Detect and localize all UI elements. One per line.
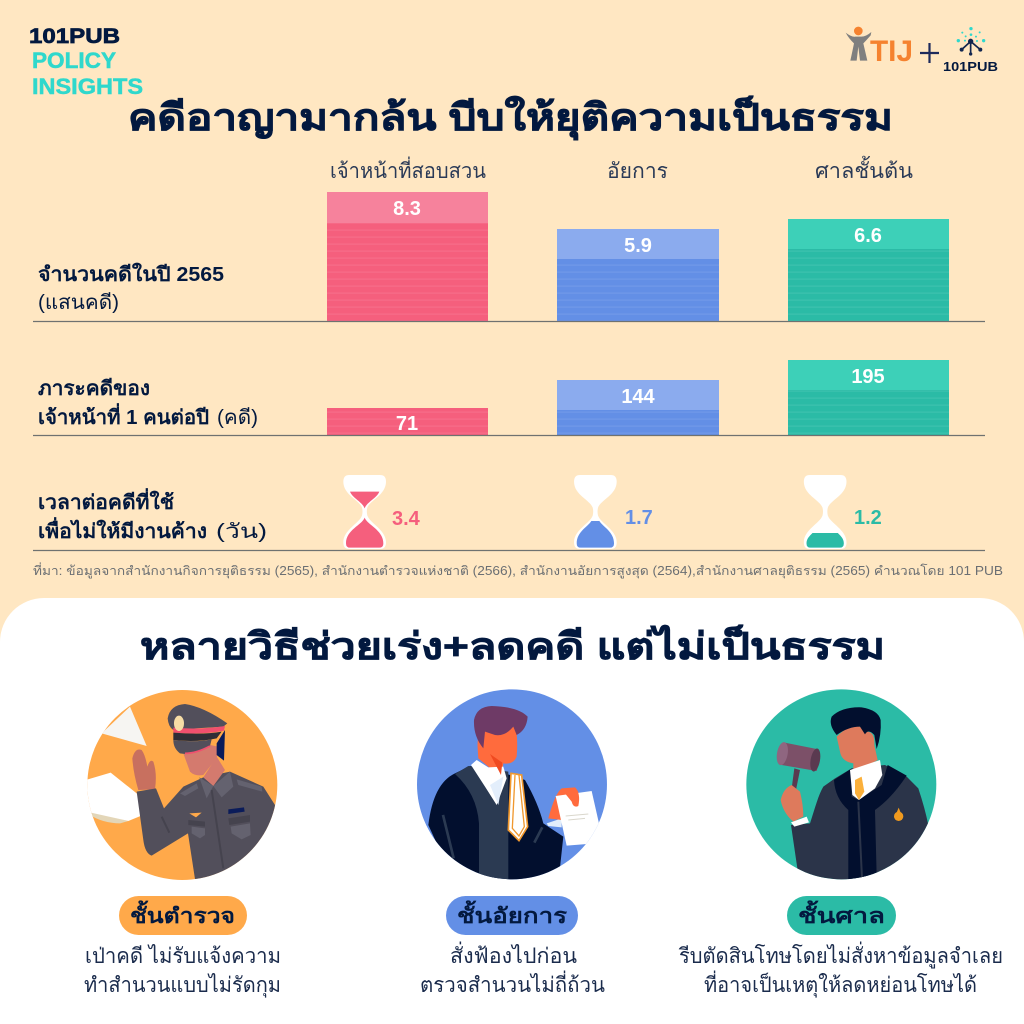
description: court: ที่อาจเป็นเหตุให้ลดหย่อนโทษได้ [704,970,977,998]
bar: investigators 8.3: 8.3 [393,198,421,220]
illustration: prosecutor [417,689,607,883]
row label: time per case: เพื่อไม่ให้มีงานค้าง [38,516,207,543]
row label: time per case: (วัน) [216,521,267,543]
description: police [84,944,281,998]
bar: investigators 8.3 [327,192,488,321]
hourglass: prosecutors 1.7 days [574,475,653,549]
bar: prosecutors 144 [557,380,719,435]
pill: police: ชั้นตำรวจ [130,900,235,928]
hourglass: courts 1.2 days [804,475,882,549]
plus sign [920,43,939,63]
column headings [330,156,913,183]
logos: TIJ + 101PUB [846,27,998,74]
bar: courts 6.6 [788,219,949,321]
row label: cases in 2565: จำนวนคดีในปี 2565 [38,262,224,286]
description: prosecutor [420,941,605,997]
logo: 101PUB Policy Insights: 101PUB [29,25,120,48]
illustration: police officer [83,690,277,890]
hourglass: investigators 3.4 days: 3.4 [392,508,421,530]
column: court level [678,896,1003,998]
column headings: ศาลชั้นต้น [815,156,913,183]
panel: methods that speed up cases [0,598,1024,1024]
description: prosecutor: สั่งฟ้องไปก่อน [450,941,577,968]
pill: prosecutor [446,896,578,935]
column headings: เจ้าหน้าที่สอบสวน [330,156,486,183]
logo: 101PUB Policy Insights: INSIGHTS [32,74,143,99]
column: prosecutor level [420,896,605,997]
row label: caseload per officer [38,377,258,429]
logo: 101PUB Policy Insights [29,25,143,99]
row label: caseload per officer: ภาระคดีของ [38,377,150,400]
row label: caseload per officer: เจ้าหน้าที่ 1 คนต่อปี [38,402,209,429]
hourglass: prosecutors 1.7 days: 1.7 [625,507,653,529]
row label: caseload per officer: (คดี) [217,407,258,429]
logo: 101PUB Policy Insights: POLICY [32,48,116,73]
bar: prosecutors 5.9 [557,229,719,321]
panel heading: หลายวิธีช่วยเร่ง+ลดคดี แต่ไม่เป็นธรรม [140,623,885,667]
hourglass: courts 1.2 days: 1.2 [854,507,882,529]
logos: TIJ + 101PUB: 101PUB [943,59,998,74]
icon: TIJ figure [846,27,871,61]
pill: court: ชั้นศาล [798,900,885,928]
column headings: อัยการ [607,160,668,183]
row label: cases in 2565: (แสนคดี) [38,292,119,314]
description: court [678,941,1003,998]
bar: prosecutors 5.9: 5.9 [624,235,652,257]
bar: courts 6.6: 6.6 [854,225,882,247]
bar: prosecutors 144: 144 [621,386,656,408]
row label: time per case: เวลาต่อคดีที่ใช้ [38,487,174,514]
bar: investigators 71 [327,408,488,435]
title: คดีอาญามากล้น บีบให้ยุติความเป็นธรรม [128,94,893,141]
bar chart: cases in 2565 [327,192,949,321]
logos: TIJ + 101PUB: TIJ [870,35,913,68]
icon: 101PUB network mark [957,27,985,56]
description: prosecutor: ตรวจสำนวนไม่ถี่ถ้วน [420,970,605,997]
row label: time per case [38,487,267,543]
source note: ที่มา: ข้อมูลจากสำนักงานกิจการยุติธรรม (2565), สำนักงานตำรวจแห่งชาติ (2566), สำนักงานอัยการสูงสุด (2564),สำนักงานศาลยุติธรรม (2565) คำนวณโดย 101 PUB [33,562,1003,579]
pill: court [787,896,896,935]
row label: cases in 2565 [38,262,224,314]
column: police level [84,896,281,998]
description: police: ทำสำนวนแบบไม่รัดกุม [84,973,281,998]
hourglass: investigators 3.4 days [343,475,421,549]
bar: courts 195: 195 [851,366,885,388]
description: court: รีบตัดสินโทษโดยไม่สั่งหาข้อมูลจำเลย [678,941,1003,969]
pill: police [119,896,247,935]
bar chart: caseload per officer [327,360,949,435]
bar: courts 195 [788,360,949,435]
description: police: เป่าคดี ไม่รับแจ้งความ [85,944,281,968]
bar: investigators 71: 71 [396,413,418,435]
illustration: judge [746,689,936,888]
pill: prosecutor: ชั้นอัยการ [457,900,568,928]
